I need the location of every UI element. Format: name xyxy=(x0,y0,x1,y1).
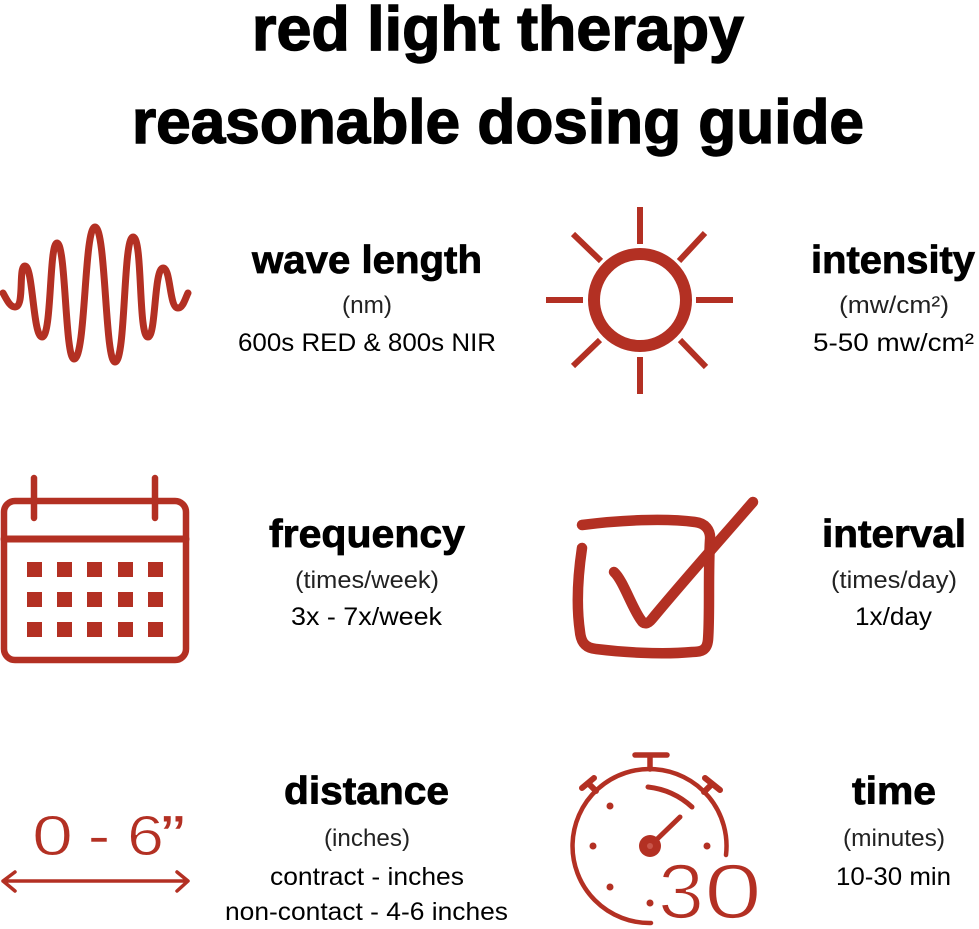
text block: distance: distance xyxy=(284,770,449,813)
text block: frequency: 3x - 7x/week xyxy=(291,603,443,631)
icon: checkbox xyxy=(578,502,753,653)
text block: time: (minutes) xyxy=(843,825,945,852)
icon: distance arrow: ” xyxy=(161,804,185,868)
icon: calendar xyxy=(4,478,186,660)
icon: wave xyxy=(3,227,188,362)
title xyxy=(132,0,864,157)
text block: interval: interval xyxy=(822,513,966,556)
text block: intensity: intensity xyxy=(811,239,975,282)
text block: intensity xyxy=(811,239,975,357)
text block: interval xyxy=(822,513,966,631)
icon: sun xyxy=(546,207,733,394)
text block: interval: 1x/day xyxy=(855,603,933,631)
text block: wave length: 600s RED & 800s NIR xyxy=(238,329,496,357)
text block: distance xyxy=(225,770,508,926)
icon: distance arrow: 6 xyxy=(127,804,164,868)
text block: wave length: (nm) xyxy=(342,292,392,319)
icon: distance arrow: - xyxy=(88,804,110,868)
text block: time: 10-30 min xyxy=(836,863,951,891)
text block: distance: (inches) xyxy=(324,825,410,852)
text block: time: time xyxy=(852,770,936,813)
icon: distance arrow xyxy=(3,804,188,891)
title: reasonable dosing guide xyxy=(132,88,864,157)
text block: frequency: frequency xyxy=(269,513,465,556)
text block: frequency xyxy=(269,513,465,631)
icon: distance arrow: 0 xyxy=(32,804,73,868)
text block: interval: (times/day) xyxy=(831,567,957,594)
text block: intensity: 5-50 mw/cm² xyxy=(813,329,974,357)
text block: wave length xyxy=(238,239,496,357)
text block: intensity: (mw/cm²) xyxy=(839,292,949,319)
text block: frequency: (times/week) xyxy=(295,567,439,594)
text block: wave length: wave length xyxy=(251,239,482,282)
text block: distance: non-contact - 4-6 inches xyxy=(225,898,508,926)
text block: distance: contract - inches xyxy=(270,863,464,891)
text block: time xyxy=(836,770,951,891)
icon: stopwatch xyxy=(573,755,762,929)
